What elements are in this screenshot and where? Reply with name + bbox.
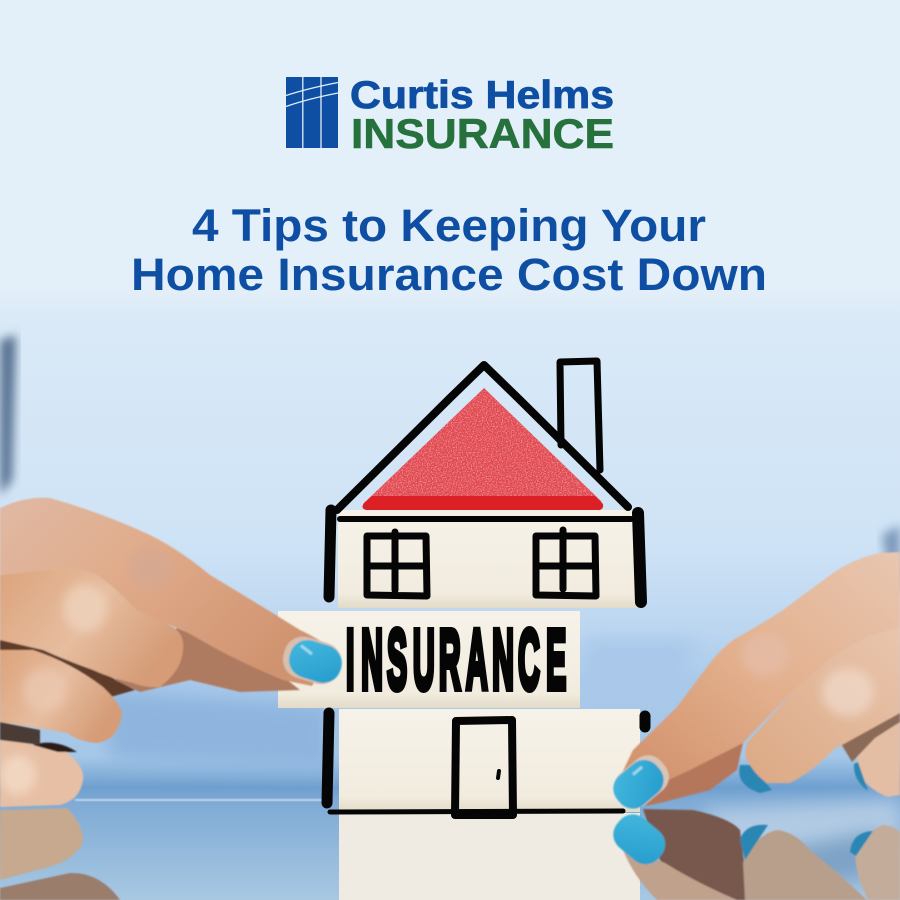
right hand knuckles: [741, 633, 789, 677]
right thumb nail: [606, 748, 676, 816]
bottom block: [339, 709, 640, 812]
title: Home Insurance Cost Down: [131, 249, 767, 300]
right hand: [606, 552, 900, 900]
title: [131, 200, 767, 300]
logo: [286, 74, 614, 157]
left little finger: [0, 737, 83, 807]
ground line: [330, 811, 623, 812]
right middle finger: [746, 627, 900, 783]
left middle finger: [0, 568, 183, 687]
dark gap between left fingers: [0, 636, 135, 700]
left hand: [0, 498, 347, 900]
right window: [536, 530, 596, 596]
left wall stroke: [329, 510, 331, 597]
reflected nail: [606, 807, 672, 871]
lower left wall stroke: [327, 713, 329, 803]
lower right wall stroke: [640, 716, 650, 727]
block label: INSURANCE: INSURANCE: [346, 614, 566, 707]
left index finger: [0, 498, 332, 686]
logo wordmark: INSURANCE: INSURANCE: [351, 110, 614, 157]
logo wordmark: Curtis Helms: Curtis Helms: [350, 74, 614, 117]
right little finger: [857, 718, 900, 797]
middle block: [278, 611, 580, 708]
palm shadow under right index: [645, 740, 743, 806]
right wall stroke: [638, 513, 641, 602]
door: [455, 720, 513, 815]
house drawing: [327, 361, 645, 815]
left ring finger: [0, 650, 122, 743]
right middle-finger nail: [739, 765, 772, 793]
door knob: [498, 771, 499, 778]
palm shadow under left index: [115, 628, 300, 692]
dark gap between right fingers: [840, 706, 900, 762]
title: 4 Tips to Keeping Your: [192, 200, 706, 251]
right little-finger nail: [854, 762, 868, 791]
left hand knuckles: [63, 584, 107, 632]
chimney: [560, 361, 600, 470]
logo mark: window: [286, 77, 338, 148]
left thumb nail: [278, 632, 347, 689]
eave line: [340, 516, 631, 522]
right hand reflection: [622, 809, 900, 900]
top block: [338, 510, 640, 608]
red roof block: [363, 388, 603, 510]
left window: [367, 532, 427, 596]
right index finger: [622, 552, 900, 782]
wooden block reflection: [339, 813, 640, 900]
roof outline: [337, 365, 628, 510]
left hand reflection: [0, 808, 120, 900]
